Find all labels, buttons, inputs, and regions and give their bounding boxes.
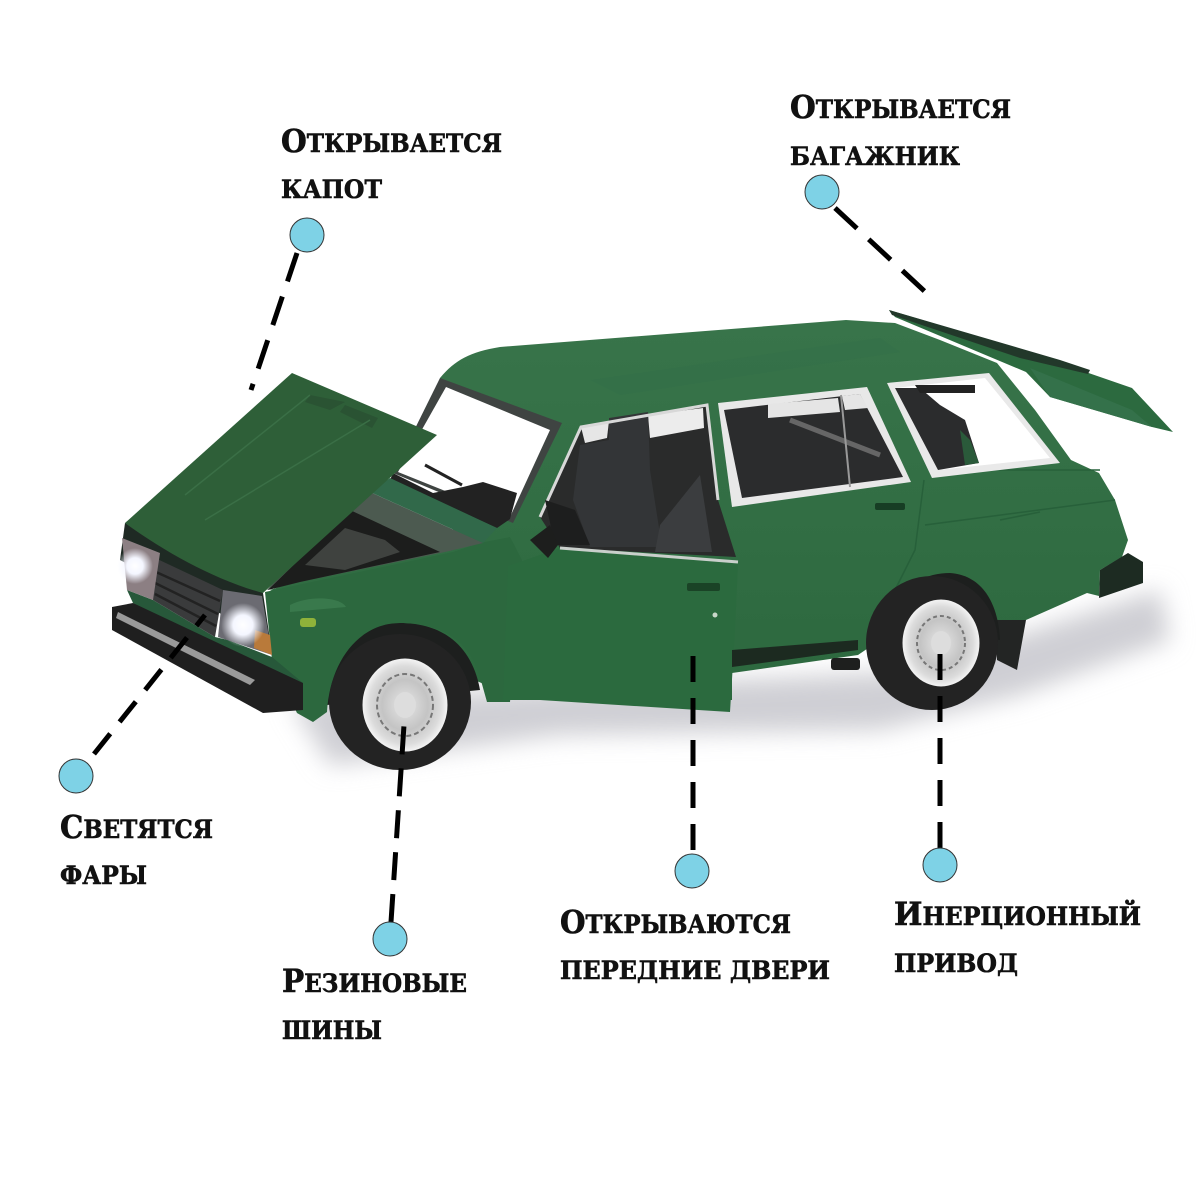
- label: front doors open: [560, 903, 830, 985]
- label: hood opens: ОТКРЫВАЕТСЯ: [281, 122, 502, 160]
- marker: tires: [373, 922, 407, 956]
- label: headlights glow: ФАРЫ: [60, 861, 147, 890]
- marker: inertia drive: [923, 848, 957, 882]
- front wheel well: [327, 623, 480, 705]
- label: inertia drive: ИНЕРЦИОННЫЙ: [894, 895, 1141, 933]
- label: headlights glow: [60, 808, 213, 890]
- rear wheel: [866, 576, 998, 710]
- label: rubber tires: [282, 962, 467, 1045]
- rear body creases: [890, 470, 1115, 600]
- car illustration: [112, 310, 1173, 770]
- rear wheel well: [885, 573, 1000, 640]
- roof highlight: [590, 338, 900, 395]
- label: headlights glow: СВЕТЯТСЯ: [60, 808, 213, 846]
- rear underbody: [831, 658, 860, 670]
- cowl: [370, 478, 497, 543]
- label: inertia drive: [894, 895, 1141, 978]
- front door: [503, 548, 738, 712]
- label: trunk opens: ОТКРЫВАЕТСЯ: [790, 88, 1011, 126]
- rear side window: [887, 373, 1060, 478]
- label: hood opens: КАПОТ: [281, 175, 382, 204]
- marker: doors: [675, 854, 709, 888]
- rear bumper: [1099, 553, 1143, 598]
- side marker: [300, 618, 316, 627]
- left headlight: [117, 538, 160, 600]
- label: rubber tires: ШИНЫ: [282, 1016, 382, 1045]
- rear door window: [718, 387, 911, 507]
- label: inertia drive: ПРИВОД: [894, 949, 1018, 978]
- marker: headlights: [59, 759, 93, 793]
- front fender: [265, 537, 522, 722]
- ground shadow: [290, 590, 1170, 765]
- label: trunk opens: [790, 88, 1011, 171]
- front door opening and seats: [540, 405, 736, 557]
- sill: [732, 640, 858, 667]
- front bumper: [112, 603, 303, 713]
- callout: hood line: [251, 253, 297, 390]
- front panel: [127, 590, 303, 683]
- front wheel: [329, 634, 471, 770]
- callout: doors line: [690, 645, 696, 850]
- callout: tailgate line: [835, 208, 934, 300]
- callout: headlights line: [94, 615, 205, 754]
- label: front doors open: ПЕРЕДНИЕ ДВЕРИ: [560, 956, 830, 985]
- door mirror: [530, 525, 558, 558]
- under-hood shade: [120, 523, 270, 640]
- rear tailgate: [889, 310, 1173, 432]
- callout: tires line: [391, 725, 404, 922]
- mudflap: [997, 620, 1026, 670]
- engine bay: [267, 492, 483, 590]
- right headlight: [218, 590, 272, 655]
- callout: inertia drive line: [938, 645, 942, 848]
- grille: [153, 557, 223, 637]
- label: front doors open: ОТКРЫВАЮТСЯ: [560, 903, 791, 941]
- rear door handle: [875, 503, 905, 510]
- label: rubber tires: РЕЗИНОВЫЕ: [282, 962, 467, 1000]
- hood: [125, 373, 437, 593]
- windshield: [390, 378, 562, 528]
- marker: tailgate: [805, 175, 839, 209]
- car body: [270, 320, 1128, 700]
- marker: hood: [290, 218, 324, 252]
- label: hood opens: [281, 122, 502, 204]
- fender highlight: [290, 598, 346, 612]
- label: trunk opens: БАГАЖНИК: [790, 142, 960, 171]
